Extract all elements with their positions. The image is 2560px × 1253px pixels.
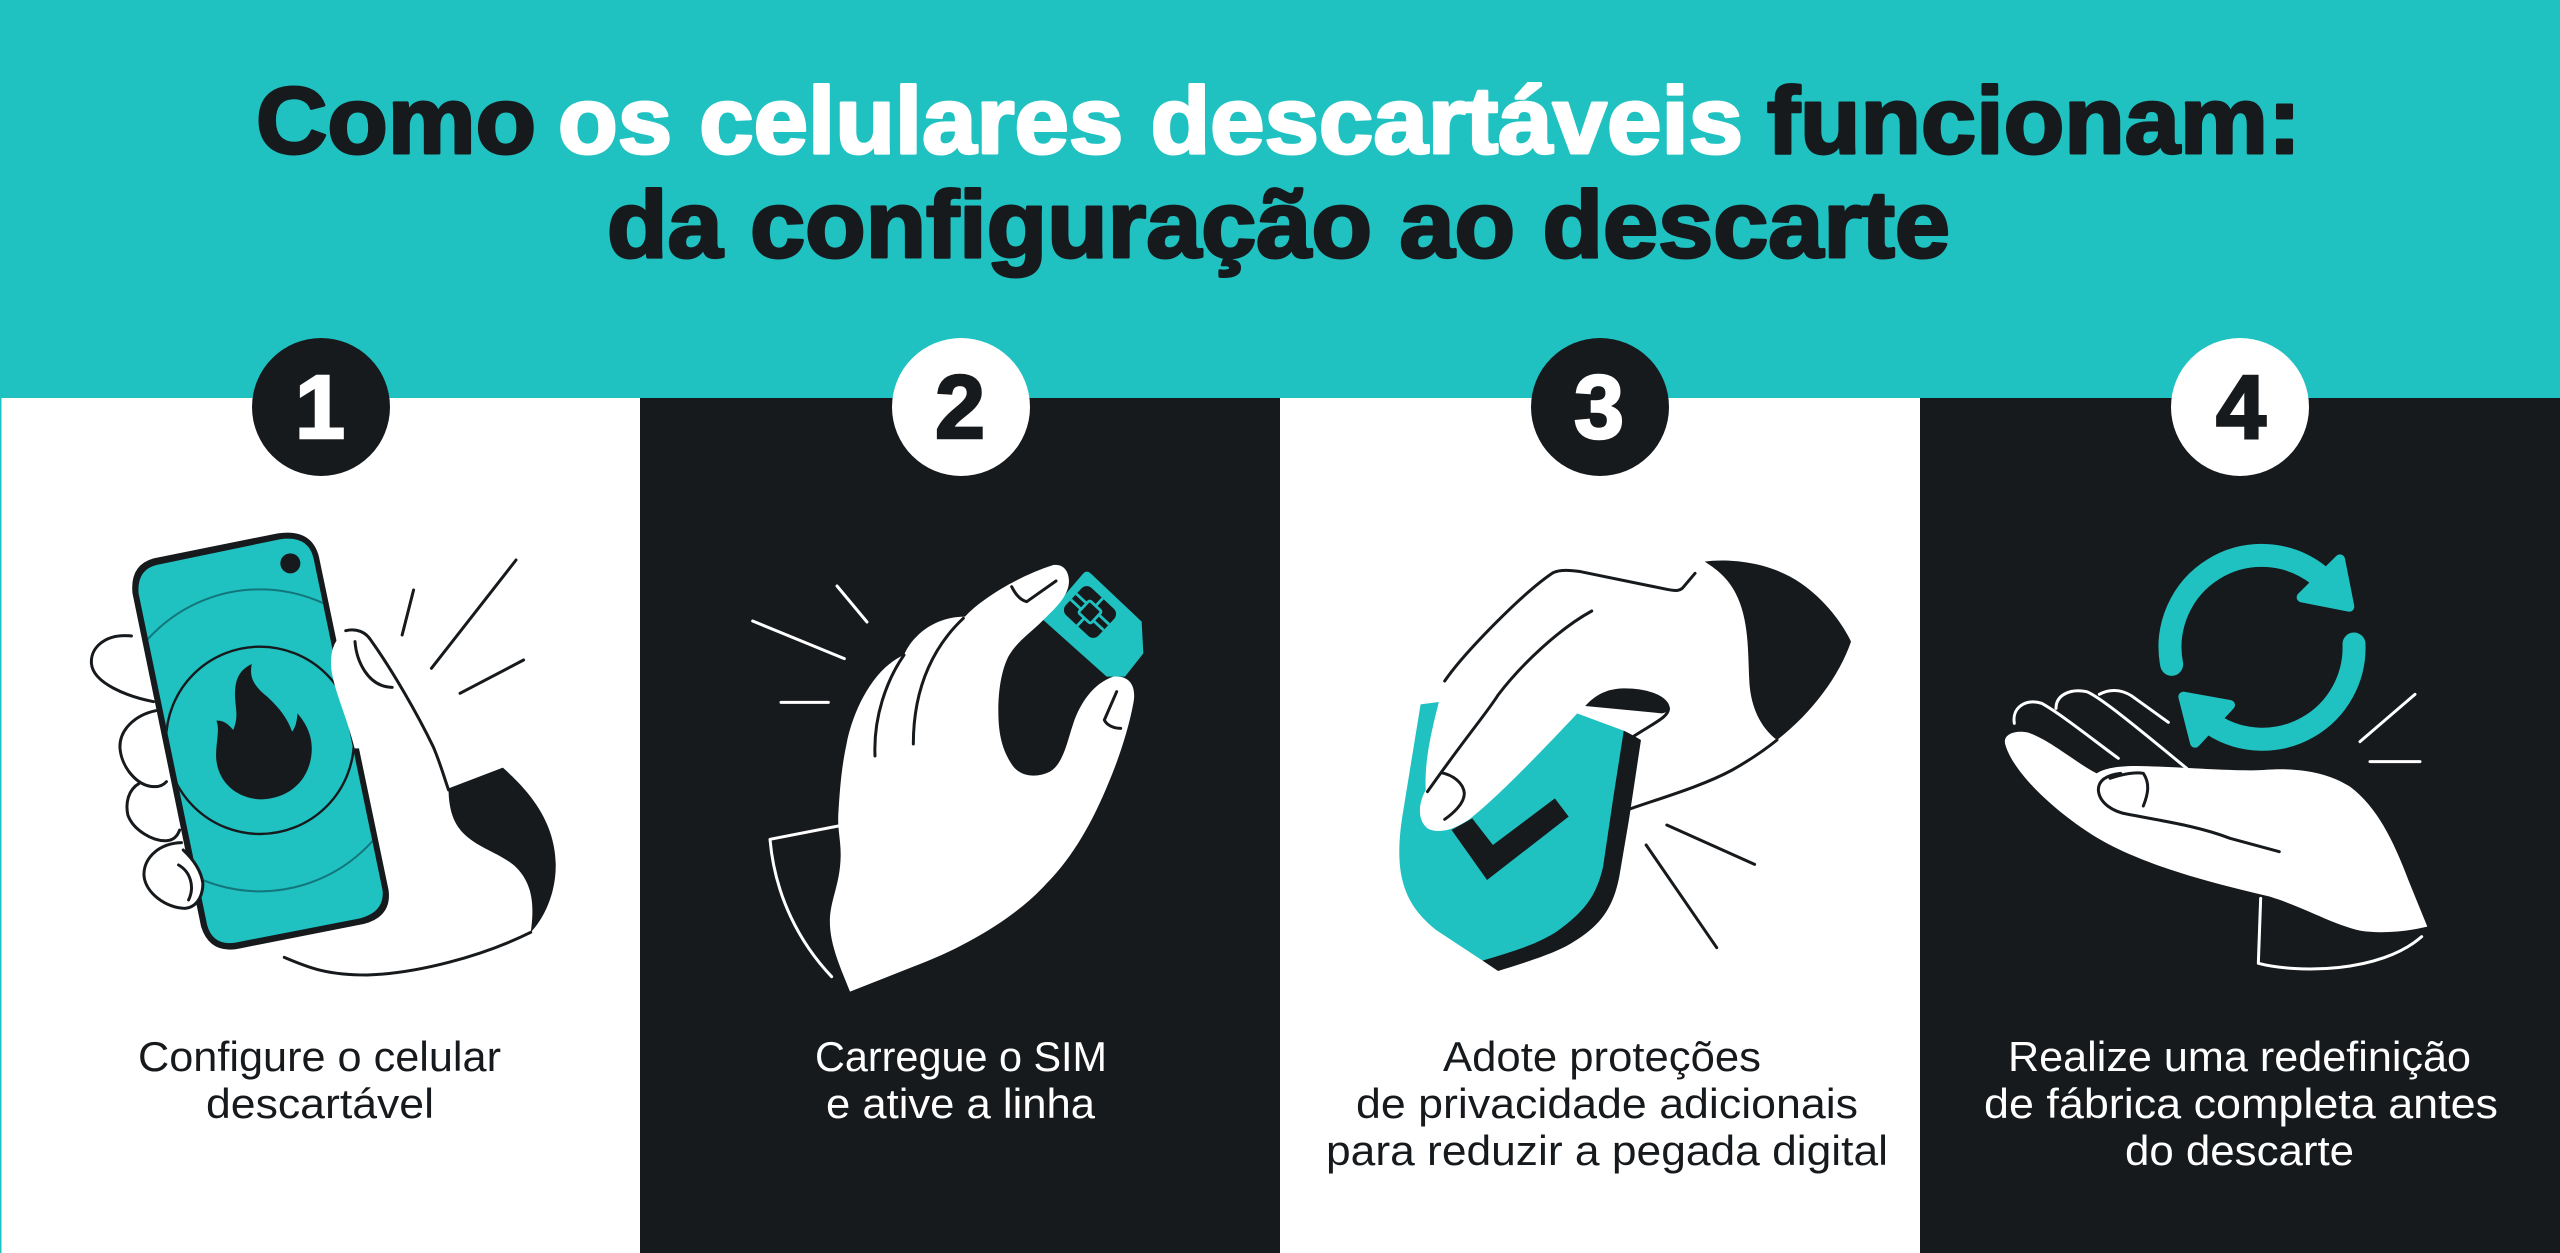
sleeve — [449, 768, 556, 932]
step number 2 — [892, 338, 1030, 476]
step number 2: 2 — [935, 358, 985, 458]
icon: hand holding phone with flame — [91, 533, 556, 975]
hand — [1420, 570, 1694, 831]
caption step 2: e ative a linha — [826, 1080, 1096, 1127]
burst lines — [753, 586, 867, 702]
title — [256, 68, 2301, 278]
sleeve — [1705, 561, 1851, 740]
palm shadow — [1585, 688, 1670, 713]
caption step 3: de privacidade adicionais — [1356, 1080, 1858, 1127]
step number 1 — [252, 338, 390, 476]
thumb — [331, 631, 417, 748]
burst lines — [402, 560, 524, 693]
caption step 4: de fábrica completa antes — [1984, 1080, 2498, 1127]
step number 3 — [1531, 338, 1669, 476]
cuff — [2258, 898, 2422, 969]
title highlight: os celulares descartáveis: os celulares descartáveis — [558, 68, 1743, 174]
caption step 3: Adote proteções — [1443, 1033, 1761, 1080]
back fingers — [91, 636, 180, 841]
caption step 1: descartável — [206, 1080, 434, 1127]
panel: step 2 background — [640, 398, 1280, 1253]
step number 4: 4 — [2216, 358, 2266, 458]
icon: hand holding privacy shield — [1399, 561, 1851, 971]
step number 3: 3 — [1574, 358, 1624, 458]
phone screen — [138, 539, 383, 943]
caption step 4: Realize uma redefinição — [2008, 1033, 2471, 1080]
icon: hand holding SIM card — [753, 565, 1143, 992]
refresh arrows — [2170, 555, 2354, 743]
burst lines — [2360, 694, 2420, 762]
camera — [280, 553, 300, 573]
caption step 4: do descarte — [2125, 1127, 2354, 1174]
hand — [830, 565, 1134, 992]
caption step 3: para reduzir a pegada digital — [1326, 1127, 1888, 1174]
panel: step 3 background — [1280, 398, 1920, 1253]
step number 1: 1 — [295, 358, 345, 458]
front finger — [144, 843, 203, 908]
caption step 2 — [815, 1033, 1107, 1127]
step number 4 — [2171, 338, 2309, 476]
SIM card — [1043, 572, 1143, 677]
caption step 4 — [1984, 1033, 2498, 1174]
panel: step 4 background — [1920, 398, 2560, 1253]
title second line: da configuração ao descarte — [607, 172, 1950, 278]
hand outlines — [179, 630, 531, 975]
title word: funcionam: funcionam: — [1767, 68, 2301, 174]
caption step 2: Carregue o SIM — [815, 1033, 1107, 1080]
SIM chip — [1061, 583, 1119, 641]
shield shadow — [1483, 730, 1641, 971]
finger lines — [875, 581, 1121, 756]
phone body — [132, 533, 389, 950]
panel: step 1 background — [0, 398, 640, 1253]
burst lines — [1646, 825, 1755, 948]
signal rings — [148, 588, 372, 892]
caption step 1: Configure o celular — [138, 1033, 501, 1080]
cuff — [770, 826, 838, 977]
header band — [0, 0, 2560, 398]
icon: open hand with refresh arrows — [2005, 555, 2427, 969]
caption step 1 — [138, 1033, 501, 1127]
hand outlines — [1427, 570, 1777, 819]
flame — [216, 664, 312, 799]
fingers — [2014, 690, 2187, 768]
hand — [2005, 732, 2427, 932]
check mark — [1452, 798, 1569, 880]
shield — [1399, 702, 1624, 961]
title word: Como: Como — [256, 68, 536, 174]
thumb lines — [2098, 773, 2279, 852]
caption step 3 — [1326, 1033, 1888, 1174]
